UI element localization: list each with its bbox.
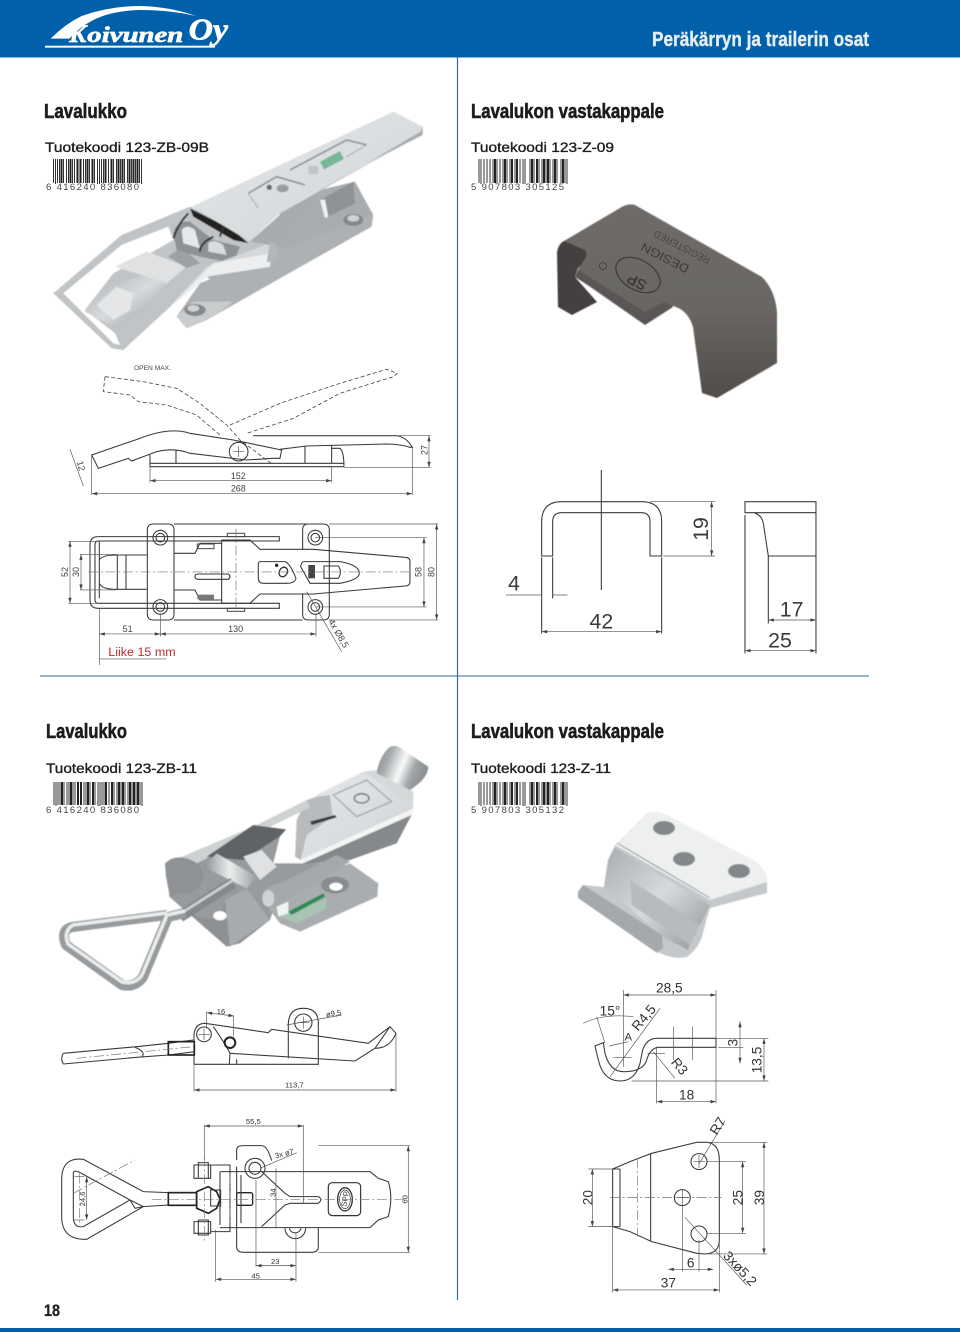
- open max label: OPEN MAX.: [134, 365, 171, 372]
- barcode 1: 6 416240 836080: [46, 182, 139, 193]
- drawing: latch side and top views with dimensions: 58: [414, 567, 424, 577]
- drawing: latch 123-ZB-11 views with dimensions: 34: [268, 1188, 277, 1197]
- heading: Lavalukko bottom: Lavalukko: [46, 721, 127, 743]
- plate plan view: [613, 1142, 719, 1254]
- drawing: counterpart views with dimensions: 42: [589, 609, 613, 633]
- drawing: latch 123-ZB-11 views with dimensions: [62, 1007, 410, 1282]
- drawing: counterpart 123-Z-11 views with dimensions: 18: [679, 1087, 694, 1102]
- photo: counterpart 123-Z-11: [578, 812, 767, 958]
- drawing: latch side and top views with dimensions: [60, 365, 438, 665]
- drawing: counterpart 123-Z-11 views with dimensions: A: [625, 1032, 633, 1044]
- drawing: counterpart views with dimensions: 17: [780, 598, 804, 622]
- drawing: counterpart 123-Z-11 views with dimensions: 25: [731, 1190, 746, 1205]
- barcode 2: 5 907803 305125: [471, 182, 564, 193]
- drawing: latch 123-ZB-11 views with dimensions: SPP: [339, 1191, 351, 1207]
- drawing: counterpart 123-Z-11 views with dimensions: 15°: [600, 1003, 620, 1018]
- logo: Koivunen Oy: K: [68, 20, 88, 48]
- drawing: latch side and top views with dimensions: 27: [419, 445, 429, 455]
- side view: [62, 1008, 396, 1064]
- drawing: latch 123-ZB-11 views with dimensions: 45: [251, 1271, 260, 1280]
- side view: [92, 431, 412, 468]
- drawing: counterpart 123-Z-11 views with dimensions: 3: [726, 1039, 741, 1046]
- footer bar: [0, 1328, 960, 1332]
- drawing: counterpart 123-Z-11 views with dimensions: 6: [687, 1255, 694, 1270]
- photo: latch 123-ZB-11: [165, 746, 428, 947]
- drawing: latch side and top views with dimensions: 80: [426, 567, 436, 577]
- photo: counterpart 123-Z-09: REGISTERED: [652, 227, 712, 265]
- barcode 3: 6 416240 836080: [46, 805, 139, 816]
- drawing: counterpart 123-Z-11 views with dimensions: 3xø5,2: [720, 1248, 760, 1289]
- drawing: latch 123-ZB-11 views with dimensions: ø9,5: [325, 1008, 342, 1019]
- photo: counterpart 123-Z-09: [557, 204, 777, 398]
- barcode 4: [471, 782, 567, 816]
- hook profile: [595, 1038, 716, 1081]
- drawing: counterpart views with dimensions: 4: [508, 572, 520, 596]
- drawing: latch side and top views with dimensions: 4x Ø8,5: [326, 617, 351, 650]
- row divider: [40, 675, 869, 677]
- drawing: latch 123-ZB-11 views with dimensions: 16: [217, 1007, 225, 1016]
- drawing: latch 123-ZB-11 views with dimensions: 3x ø7: [274, 1147, 295, 1160]
- top view: [147, 524, 329, 620]
- drawing: latch side and top views with dimensions: 30: [71, 567, 81, 577]
- drawing: latch 123-ZB-11 views with dimensions: 23: [271, 1257, 280, 1266]
- heading: counterpart bottom: Lavalukon vastakappale: [471, 721, 664, 743]
- logo: Koivunen Oy: [45, 6, 228, 48]
- header bar: [0, 0, 960, 58]
- drawing: counterpart 123-Z-11 views with dimensions: [580, 980, 768, 1293]
- drawing: latch side and top views with dimensions: 52: [60, 567, 70, 577]
- logo: Koivunen Oy: Oy: [189, 12, 228, 46]
- photo: latch 123-ZB-11 pull handle: [64, 911, 185, 986]
- product code 123-Z-11: Tuotekoodi 123-Z-11: [471, 760, 611, 776]
- header title: Peräkärryn ja trailerin osat: [652, 29, 869, 51]
- barcode 1: [46, 159, 142, 193]
- product code 123-Z-09: Tuotekoodi 123-Z-09: [471, 139, 614, 155]
- heading: counterpart top: Lavalukon vastakappale: [471, 101, 664, 123]
- drawing: latch 123-ZB-11 views with dimensions: 55,5: [246, 1117, 261, 1126]
- drawing: latch 123-ZB-11 views with dimensions: 24,6: [78, 1192, 87, 1206]
- drawing: counterpart 123-Z-11 views with dimensions: 13,5: [750, 1046, 765, 1073]
- top view: [62, 1159, 168, 1239]
- drawing: latch side and top views with dimensions: 130: [228, 624, 243, 634]
- column divider: [456, 57, 458, 1300]
- open position dashed outline: [103, 369, 397, 465]
- barcode 2: [471, 159, 567, 193]
- photo: latch 123-ZB-09B: [53, 112, 423, 350]
- drawing: counterpart 123-Z-11 views with dimensions: R4,5: [629, 1002, 659, 1034]
- drawing: latch side and top views with dimensions: 152: [231, 471, 246, 481]
- drawing: counterpart views with dimensions: 19: [689, 517, 713, 541]
- drawing: latch side and top views with dimensions: 12: [75, 460, 87, 472]
- drawing: counterpart 123-Z-11 views with dimensions: 20: [580, 1190, 595, 1205]
- drawing: counterpart 123-Z-11 views with dimensions: R7: [707, 1115, 729, 1137]
- barcode 4: 5 907803 305132: [471, 805, 564, 816]
- drawing: latch side and top views with dimensions: 268: [231, 484, 246, 494]
- drawing: counterpart 123-Z-11 views with dimensions: R3: [668, 1055, 691, 1078]
- photo: counterpart 123-Z-09: DESIGN: [639, 240, 691, 276]
- product code 123-ZB-09B: Tuotekoodi 123-ZB-09B: [45, 139, 209, 155]
- barcode 3: [46, 782, 142, 816]
- drawing: counterpart views with dimensions: 25: [768, 628, 792, 652]
- logo: Koivunen Oy: oivunen: [87, 22, 183, 47]
- drawing: counterpart views with dimensions: [506, 470, 816, 653]
- heading: Lavalukko top: Lavalukko: [44, 101, 127, 123]
- drawing: counterpart 123-Z-11 views with dimensions: 28,5: [656, 980, 683, 995]
- drawing: latch side and top views with dimensions: 51: [123, 624, 133, 634]
- drawing: counterpart 123-Z-11 views with dimensions: 39: [752, 1190, 767, 1205]
- photo: counterpart 123-Z-09: SP: [624, 269, 650, 294]
- drawing: latch 123-ZB-11 views with dimensions: 60: [401, 1195, 410, 1204]
- product code 123-ZB-11: Tuotekoodi 123-ZB-11: [46, 760, 197, 776]
- drawing: counterpart 123-Z-11 views with dimensions: 37: [661, 1275, 676, 1290]
- page number: 18: [44, 1301, 60, 1320]
- drawing: latch 123-ZB-11 views with dimensions: 113,7: [285, 1081, 304, 1090]
- note: movement 15 mm: Liike 15 mm: [108, 645, 176, 659]
